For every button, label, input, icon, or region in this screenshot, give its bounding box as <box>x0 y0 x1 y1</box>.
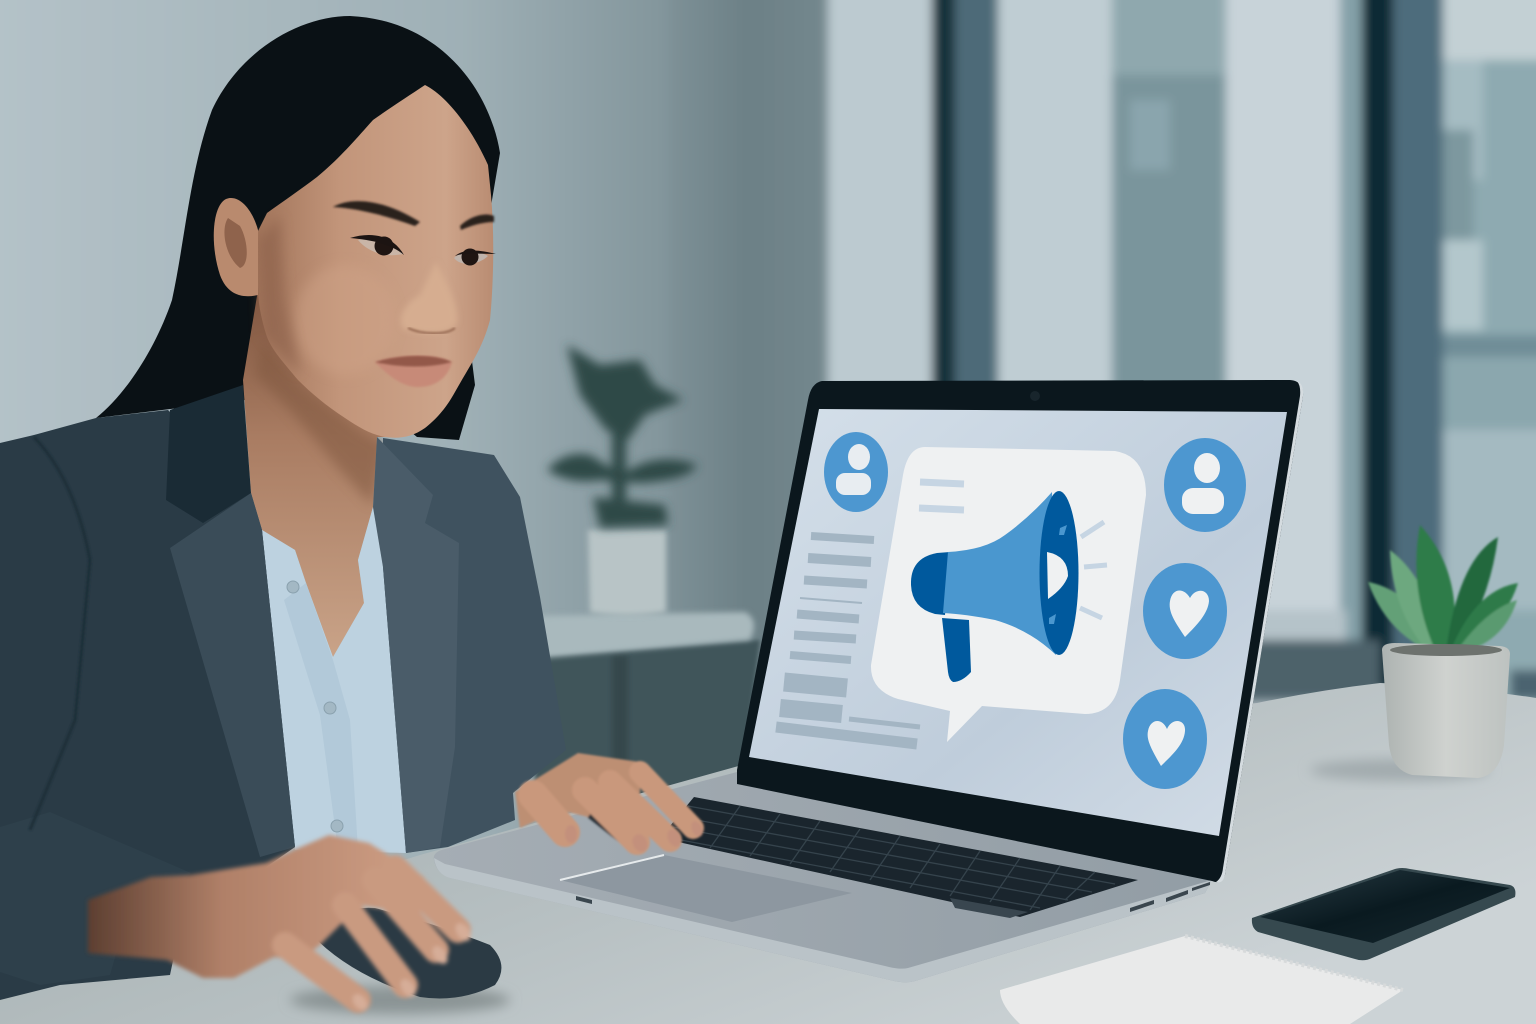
hair <box>96 16 500 440</box>
laptop <box>434 380 1303 982</box>
ear <box>214 198 258 296</box>
trackpad <box>560 855 852 922</box>
keyboard <box>660 797 1138 918</box>
laptop base <box>434 772 1212 982</box>
plant in white pot <box>1310 525 1518 781</box>
phone <box>1252 868 1515 960</box>
sleeve left <box>0 812 191 985</box>
laptop screen <box>749 409 1287 836</box>
lips <box>375 356 452 387</box>
shirt buttons <box>287 581 343 832</box>
neck shadow <box>255 340 385 505</box>
sleeve seam <box>30 437 90 830</box>
woman <box>0 16 705 1014</box>
desk <box>0 683 1536 1024</box>
icon: heart lower <box>1123 689 1207 789</box>
speech bubble <box>871 447 1146 742</box>
lip line <box>375 356 452 366</box>
icon: profile left <box>824 432 888 512</box>
blazer body right <box>383 438 566 853</box>
laptop lid <box>737 380 1303 882</box>
face <box>257 85 493 438</box>
icon: profile right <box>1164 438 1246 532</box>
icon: megaphone <box>911 491 1107 682</box>
shirt placket <box>284 583 358 850</box>
icon: heart upper <box>1143 563 1227 659</box>
notebook <box>1000 936 1403 1024</box>
shirt <box>262 507 406 853</box>
background: shelf with potted plant <box>535 345 760 800</box>
lapel right <box>373 437 459 853</box>
eyebrows <box>333 201 494 230</box>
cheek highlight <box>295 265 395 375</box>
collar left <box>166 385 251 523</box>
nose <box>401 262 457 333</box>
blazer body left <box>0 410 295 1000</box>
neck and chest <box>243 290 400 657</box>
mouse <box>312 908 501 998</box>
lapel left <box>170 493 295 857</box>
right hand on trackpad <box>515 753 705 854</box>
eyes <box>350 235 496 266</box>
laptop ports <box>576 882 1210 912</box>
left hand on mouse <box>88 835 474 1013</box>
text lines: left column <box>776 536 920 744</box>
temple shadow <box>258 215 300 375</box>
mouse shadow <box>290 986 510 1014</box>
